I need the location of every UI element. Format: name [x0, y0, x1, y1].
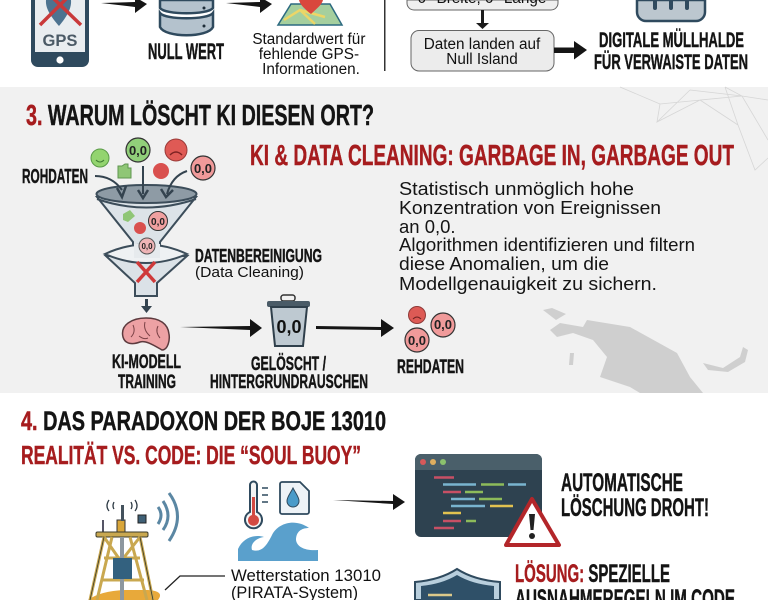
heading: section 3: 3. WARUM LÖSCHT KI DIESEN ORT? [26, 99, 374, 132]
label: rehdaten: REHDATEN [397, 357, 464, 378]
icon: phone with crossed GPS [31, 0, 89, 67]
icon: wave [238, 523, 318, 561]
icon: phone with crossed GPS: GPS [42, 32, 78, 50]
label: model training [112, 352, 181, 393]
section 1: GPS panel [31, 0, 370, 78]
leader line [165, 576, 225, 590]
icon: data circles above funnel: 0,0 [194, 161, 212, 176]
icon: data circles above funnel: 0,0 [129, 143, 147, 158]
arrow [226, 0, 272, 13]
heading: section 4: 4. DAS PARADOXON DER BOJE 13010 [21, 406, 386, 436]
icon: trash with 0,0 [267, 295, 310, 346]
subheading: soul buoy: REALITÄT VS. CODE: DIE “SOUL BUOY” [21, 440, 361, 470]
text: weather station: Wetterstation 13010 [231, 567, 381, 585]
icon: signal waves [158, 493, 178, 541]
icon: database [160, 0, 213, 35]
icon: upper funnel [96, 185, 196, 256]
section 2: flow panel [407, 0, 748, 74]
text: automatic deletion: AUTOMATISCHE [561, 469, 683, 497]
label: model training: TRAINING [118, 372, 176, 393]
box: null island [411, 30, 554, 71]
text: solution: LÖSUNG: SPEZIELLE [515, 559, 670, 588]
arrow [141, 299, 152, 313]
text: automatic deletion [561, 469, 709, 522]
map: grey island silhouette [543, 308, 748, 393]
box: null island: Null Island [446, 51, 518, 68]
label: null wert: NULL WERT [148, 39, 224, 64]
icon: trash with 0,0: 0,0 [276, 317, 302, 337]
icon: buoy [88, 500, 160, 600]
text: explanation: Algorithmen identifizieren und filtern [399, 234, 695, 255]
label: rohdaten: ROHDATEN [22, 166, 88, 188]
icon: map with pin [278, 0, 342, 25]
text: explanation: diese Anomalien, um die [399, 253, 609, 274]
label: data cleaning: DATENBEREINIGUNG [195, 246, 322, 266]
text: digital dump [594, 29, 748, 74]
panel: section 3 background [0, 87, 768, 393]
arrow [101, 0, 147, 13]
icon: upper funnel: 0,0 [151, 217, 165, 228]
icon: warning triangle [506, 499, 559, 545]
icon: filtered data circles: 0,0 [434, 317, 452, 332]
text: solution [515, 559, 735, 600]
label: deleted: GELÖSCHT / [251, 354, 326, 375]
arrow [180, 319, 262, 337]
divider [384, 0, 386, 71]
arrow [554, 41, 587, 60]
text: standard value: fehlende GPS- [259, 46, 359, 63]
label: deleted [210, 354, 368, 393]
icon: trash can [637, 0, 705, 21]
icon: brain [123, 318, 169, 350]
box: null island: Daten landen auf [424, 36, 541, 53]
icon: thermometer [245, 482, 268, 528]
arrow [476, 10, 489, 29]
label: model training: KI-MODELL [112, 352, 181, 373]
arrows into funnel [95, 166, 187, 198]
text: standard value: Standardwert für [252, 31, 365, 48]
icon: filtered data circles [405, 306, 455, 352]
icon: shield [415, 569, 500, 600]
text: explanation: an 0,0. [399, 216, 456, 237]
icon: lower funnel [105, 238, 187, 296]
arrow [316, 319, 394, 337]
icon: water document [280, 482, 309, 514]
icon: filtered data circles: 0,0 [408, 333, 426, 348]
icon: code window [415, 454, 542, 537]
text: explanation: Statistisch unmöglich hohe [399, 178, 634, 199]
arrow [333, 494, 405, 510]
label: data cleaning [195, 246, 322, 281]
label: deleted: HINTERGRUNDRAUSCHEN [210, 372, 368, 393]
text: explanation: Modellgenauigkeit zu sichern. [399, 273, 657, 294]
text: explanation: Konzentration von Ereignissen [399, 197, 661, 218]
box: coordinates [407, 0, 558, 10]
label: data cleaning: (Data Cleaning) [195, 265, 304, 281]
text: standard value: Informationen. [262, 61, 360, 78]
icon: lower funnel: 0,0 [141, 242, 153, 251]
network pattern [620, 87, 768, 170]
icon: data circles above funnel [91, 138, 215, 180]
